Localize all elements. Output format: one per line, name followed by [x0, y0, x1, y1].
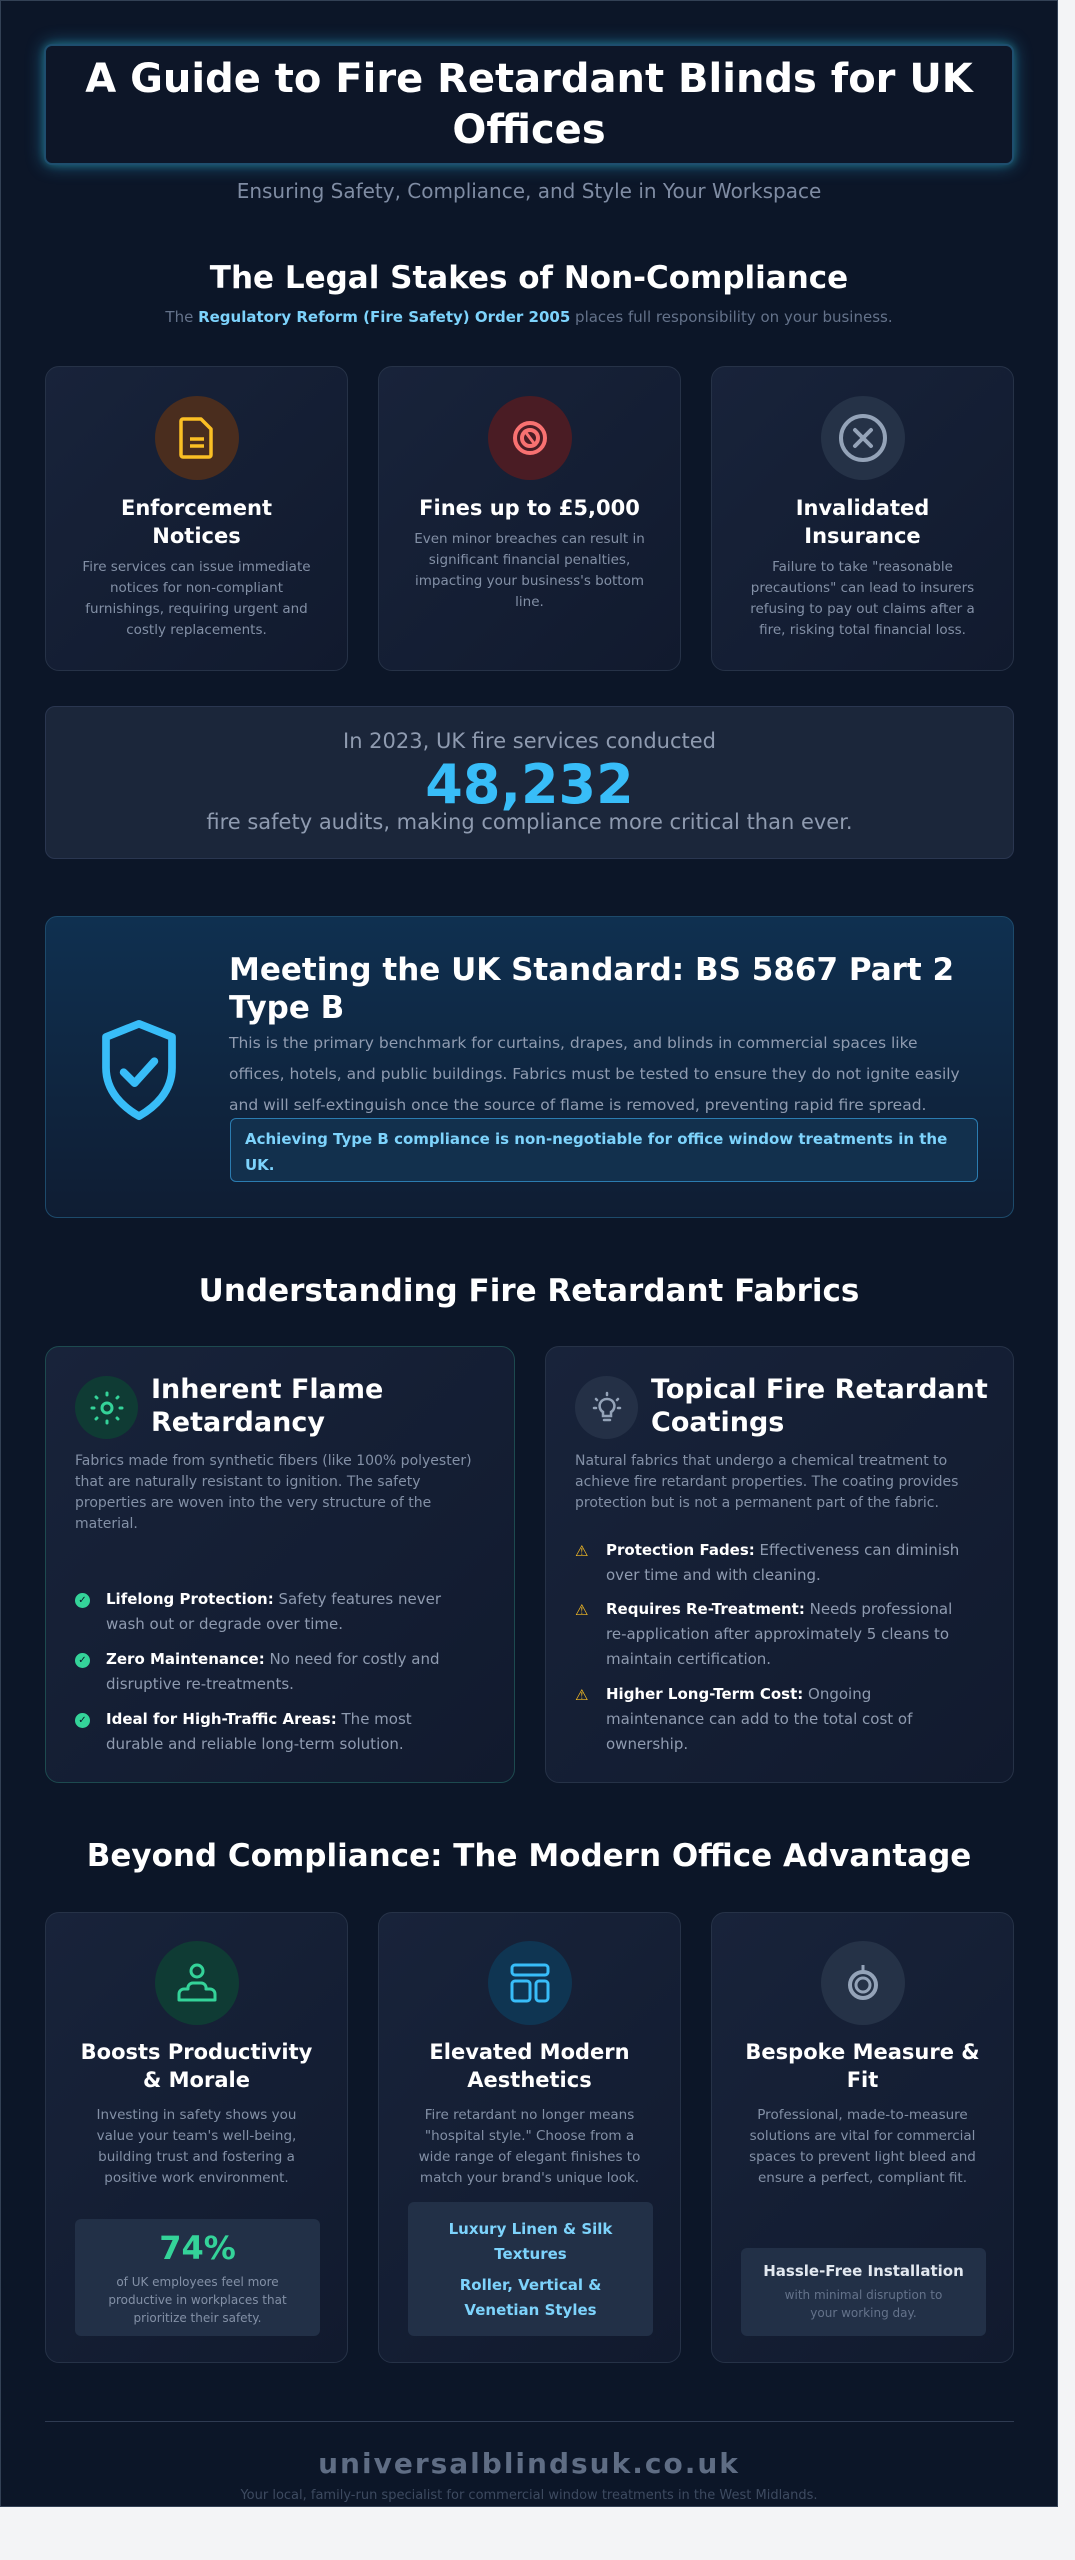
card text: Fire services can issue immediate notices for non-compliant furnishings, requiring urgent and costly replacements. — [82, 559, 311, 638]
item: high traffic: Ideal for High-Traffic Areas: The most durable and reliable long-term solution. — [106, 1710, 412, 1753]
panel title: Topical Fire Retardant — [651, 1374, 988, 1405]
card title: Boosts Productivity & Morale — [81, 2040, 312, 2092]
card title: Fines up to £5,000 — [419, 496, 640, 520]
item: fades: Protection Fades: Effectiveness can diminish over time and with cleaning. — [606, 1541, 959, 1584]
stat number: 48,232 — [425, 753, 634, 816]
item: high traffic: ✓ — [78, 1715, 87, 1726]
standard body: This is the primary benchmark for curtains, drapes, and blinds in commercial spaces like offices, hotels, and public buildings. Fabrics must be tested to ensure they do not ignite easily and will self-extinguish once the source of flame is removed, preventing rapid fire spread. — [229, 1034, 960, 1114]
icon: x circle — [821, 396, 905, 480]
card text: Even minor breaches can result in significant financial penalties, impacting your business's bottom line. — [414, 531, 645, 610]
panel title: Coatings — [651, 1407, 784, 1438]
installation box — [741, 2248, 986, 2336]
panel: bespoke fit — [711, 1912, 1014, 2363]
item: zero maintenance: Zero Maintenance: No need for costly and disruptive re-treatments. — [106, 1650, 439, 1693]
item: fades: ⚠ — [575, 1542, 588, 1560]
stat: 74%: of UK employees feel more productive in workplaces that prioritize their safety. — [108, 2275, 287, 2325]
panel description: Fabrics made from synthetic fibers (like 100% polyester) that are naturally resistant to ignition. The safety properties are woven into the very structure of the material. — [75, 1453, 472, 1532]
panel: productivity — [45, 1912, 348, 2363]
stat lead text: In 2023, UK fire services conducted — [343, 729, 716, 753]
callout — [230, 1118, 978, 1182]
card title: Bespoke Measure & Fit — [745, 2040, 980, 2092]
panel title — [151, 1374, 383, 1438]
style options box: Roller, Vertical & Venetian Styles — [460, 2276, 601, 2319]
card title: Invalidated Insurance — [796, 496, 929, 548]
icon: bulb — [575, 1376, 638, 1439]
card title: Enforcement Notices — [121, 496, 272, 548]
card title: Elevated Modern Aesthetics — [429, 2040, 630, 2092]
standard heading: Meeting the UK Standard: BS 5867 Part 2 Type B — [229, 952, 954, 1026]
stat box: audits — [45, 706, 1014, 859]
item: re-treatment: ⚠ — [575, 1601, 588, 1619]
title box — [44, 44, 1014, 165]
card text: Professional, made-to-measure solutions are vital for commercial spaces to prevent light bleed and ensure a perfect, compliant fit. — [749, 2107, 976, 2186]
benefits list — [75, 1590, 442, 1753]
heading: beyond compliance: Beyond Compliance: The Modern Office Advantage — [87, 1838, 971, 1874]
item: cost: ⚠ — [575, 1686, 588, 1704]
icon: shield — [102, 1020, 176, 1120]
regulatory note: The Regulatory Reform (Fire Safety) Order 2005 places full responsibility on your business. — [165, 308, 893, 326]
panel: aesthetics — [378, 1912, 681, 2363]
installation box: Hassle-Free Installation — [763, 2262, 964, 2280]
panel: fines — [378, 366, 681, 671]
item: zero maintenance: ✓ — [78, 1655, 87, 1666]
icon: sun — [75, 1376, 138, 1439]
heading: understanding fabrics: Understanding Fire Retardant Fabrics — [199, 1273, 859, 1309]
item: lifelong: ✓ — [78, 1595, 87, 1606]
panel title: Retardancy — [151, 1407, 325, 1438]
drawbacks list — [575, 1541, 959, 1753]
item: lifelong: Lifelong Protection: Safety features never wash out or degrade over time. — [106, 1590, 441, 1633]
panel description: Natural fabrics that undergo a chemical treatment to achieve fire retardant properties. The coating provides protection but is not a permanent part of the fabric. — [575, 1453, 958, 1511]
heading: legal stakes: The Legal Stakes of Non-Compliance — [210, 260, 848, 296]
icon: document — [155, 396, 239, 480]
stat: 74%: 74% — [159, 2229, 236, 2267]
style options box — [408, 2202, 653, 2336]
item: re-treatment: Requires Re-Treatment: Needs professional re‑application after approximately 5 cleans to maintain certification. — [606, 1600, 952, 1668]
style options box: Luxury Linen & Silk Textures — [449, 2220, 612, 2263]
icon: ring — [821, 1941, 905, 2025]
card text: Investing in safety shows you value your team's well-being, building trust and fostering a positive work environment. — [97, 2107, 296, 2186]
panel: topical — [545, 1346, 1014, 1783]
panel: enforcement notices — [45, 366, 348, 671]
icon: layout — [488, 1941, 572, 2025]
title: A Guide to Fire Retardant Blinds for UK Offices — [85, 56, 973, 153]
panel title: Inherent Flame — [151, 1374, 383, 1405]
panel: invalidated insurance — [711, 366, 1014, 671]
installation box: with minimal disruption to your working day. — [785, 2288, 942, 2320]
footer tagline: Your local, family-run specialist for commercial window treatments in the West Midlands. — [240, 2488, 818, 2503]
panel: BS 5867 standard — [45, 916, 1014, 1218]
item: cost: Higher Long-Term Cost: Ongoing maintenance can add to the total cost of ownership. — [606, 1685, 912, 1753]
card text: Fire retardant no longer means "hospital style." Choose from a wide range of elegant finishes to match your brand's unique look. — [419, 2107, 640, 2186]
stat tail text: fire safety audits, making compliance more critical than ever. — [206, 810, 853, 834]
panel title — [651, 1374, 988, 1438]
subtitle: Ensuring Safety, Compliance, and Style in Your Workspace — [237, 179, 821, 203]
callout: Achieving Type B compliance is non-negotiable for office window treatments in the UK. — [245, 1130, 947, 1174]
card text: Failure to take "reasonable precautions" can lead to insurers refusing to pay out claims after a fire, risking total financial loss. — [750, 559, 975, 638]
icon: coin — [488, 396, 572, 480]
icon: person — [155, 1941, 239, 2025]
panel: inherent — [45, 1346, 515, 1783]
footer url: universalblindsuk.co.uk — [318, 2447, 740, 2480]
stat: 74% — [75, 2219, 320, 2336]
